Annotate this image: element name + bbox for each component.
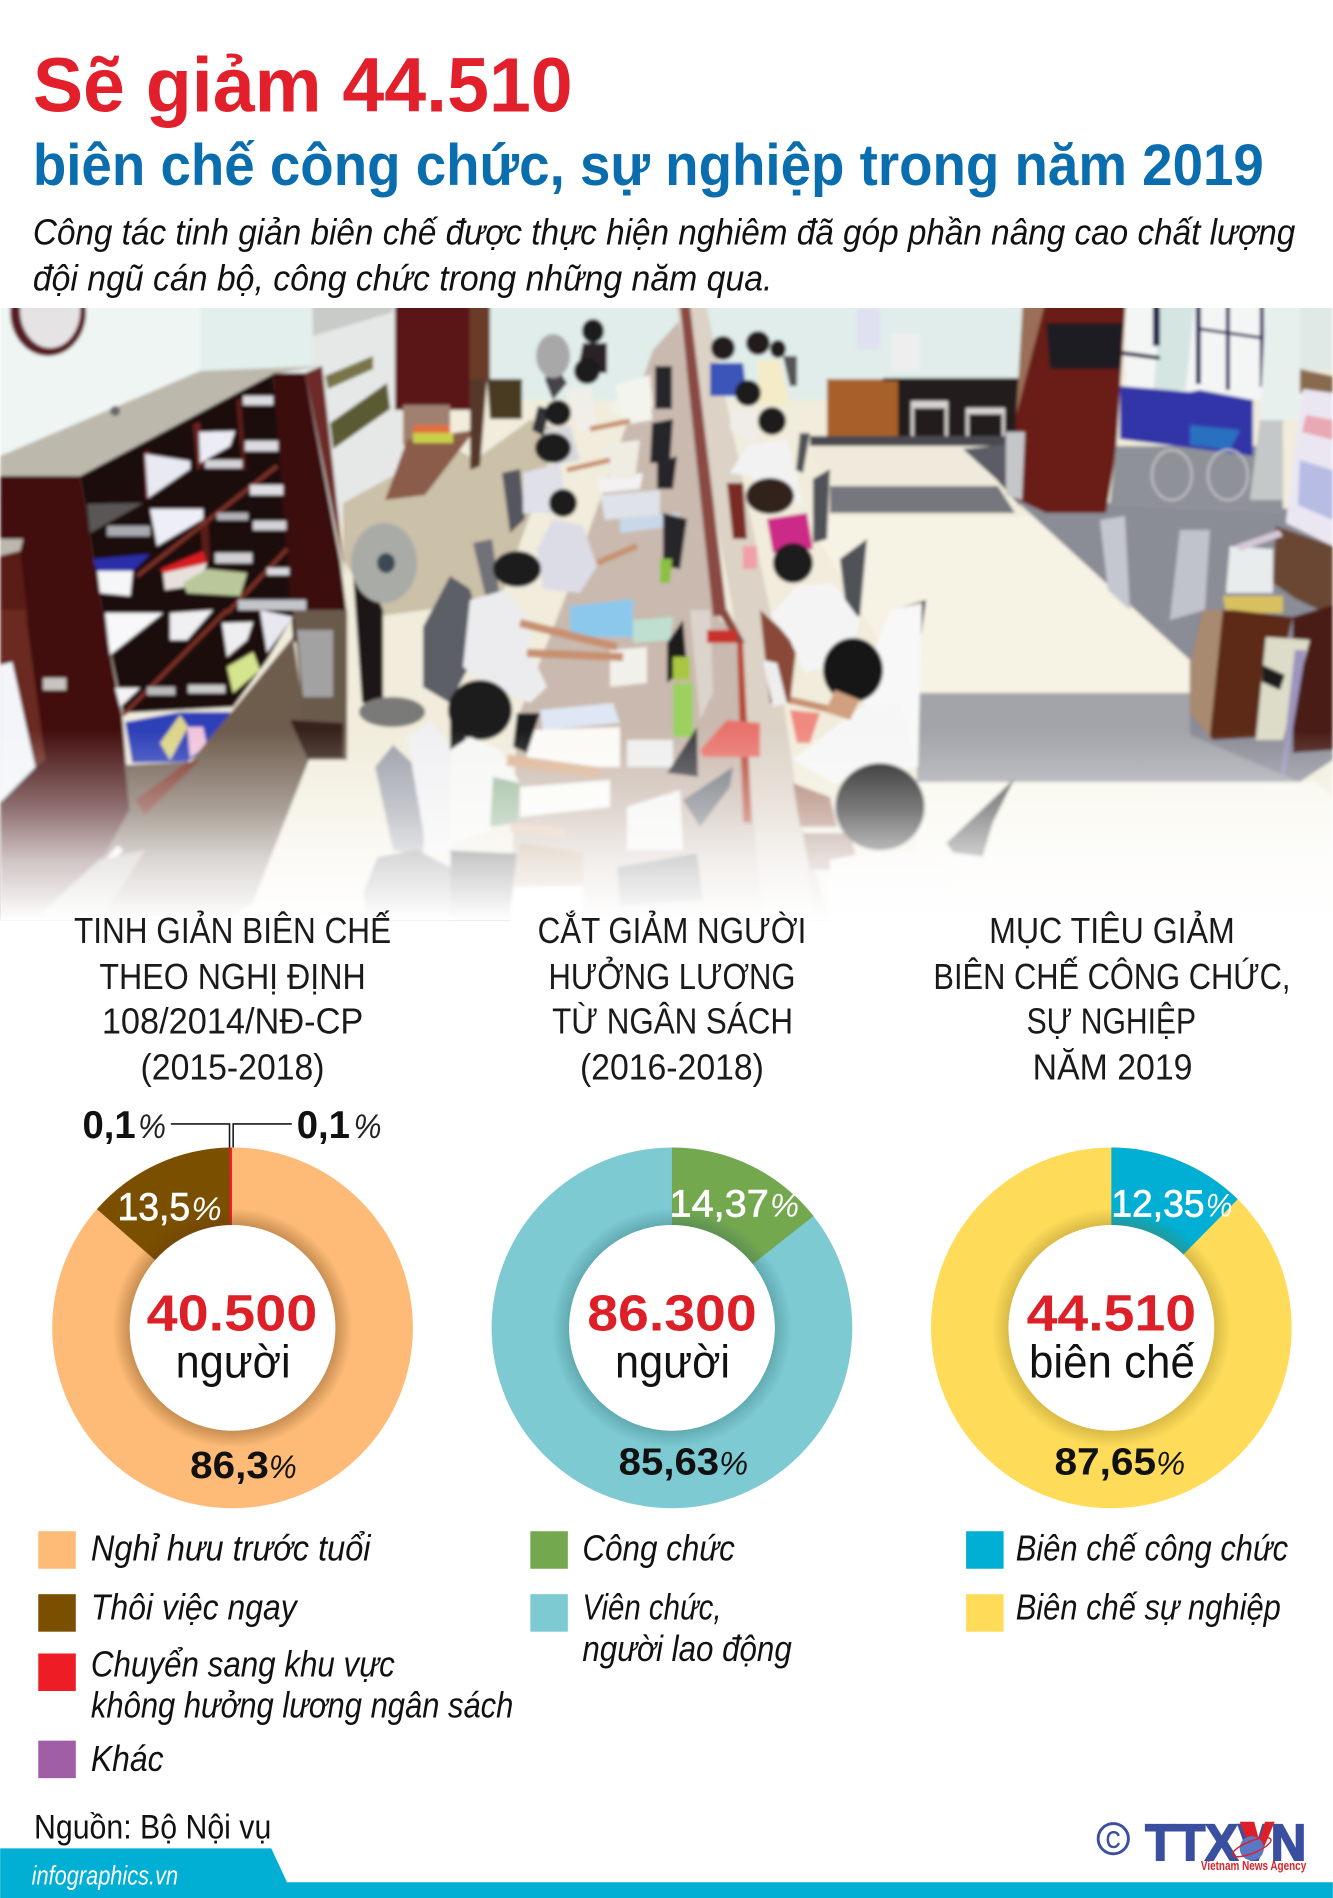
value: green segment: % bbox=[770, 1187, 799, 1224]
copyright mark: C bbox=[1106, 1827, 1120, 1854]
legend item: public employees bbox=[530, 1587, 792, 1669]
divider bbox=[676, 308, 802, 848]
inner shadow bbox=[113, 1208, 352, 1448]
value: blue segment: 12,35 bbox=[1111, 1183, 1205, 1225]
column 1 heading: THEO NGHỊ ĐỊNH bbox=[99, 956, 366, 997]
segment: transfer 0.1% bbox=[230, 1148, 232, 1247]
column 2 heading: CẮT GIẢM NGƯỜI bbox=[538, 909, 806, 951]
column 3 heading bbox=[933, 910, 1290, 1088]
globe accent bbox=[1230, 1822, 1275, 1860]
segment: civil servants 14.37% bbox=[672, 1148, 814, 1328]
intro text: đội ngũ cán bộ, công chức trong những năm qua. bbox=[33, 258, 772, 299]
legend item: public employees: Viên chức, bbox=[582, 1587, 722, 1628]
value: orange segment bbox=[190, 1444, 297, 1486]
footer bar bbox=[0, 1848, 1333, 1898]
centre circle bbox=[130, 1225, 335, 1431]
legend item: other: Khác bbox=[91, 1738, 164, 1779]
source: Nguồn: Bộ Nội vụ bbox=[34, 1809, 271, 1847]
subtitle: biên chế công chức, sự nghiệp trong năm 2019 bbox=[33, 133, 1264, 198]
inner shadow bbox=[992, 1208, 1231, 1448]
value: left callout: 0,1 bbox=[82, 1104, 136, 1147]
shelf unit bbox=[0, 366, 322, 476]
centre circle bbox=[1008, 1225, 1214, 1431]
legend item: public employees: người lao động bbox=[582, 1628, 792, 1669]
callout lines bbox=[171, 1124, 292, 1148]
photo: office service counter with staff bbox=[0, 268, 1333, 930]
value: orange segment: % bbox=[269, 1448, 297, 1485]
column 1 heading: 108/2014/NĐ-CP bbox=[102, 1001, 363, 1042]
desk row bbox=[512, 321, 814, 882]
column 1 heading bbox=[74, 910, 391, 1088]
inner shadow bbox=[552, 1208, 792, 1448]
legend chart 2 bbox=[530, 1527, 792, 1669]
legend item: public service positions bbox=[966, 1587, 1281, 1632]
centre unit: người bbox=[176, 1336, 291, 1388]
donut chart 1 bbox=[52, 1104, 413, 1508]
value: left callout bbox=[82, 1104, 166, 1147]
legend item: transfer: không hưởng lương ngân sách bbox=[91, 1685, 513, 1726]
intro text bbox=[33, 212, 1295, 299]
legend item: civil servants bbox=[530, 1527, 735, 1569]
staff left of counter: people bbox=[582, 319, 604, 343]
segment: immediate leave 13.5% bbox=[97, 1148, 233, 1328]
legend item: immediate leave: Thôi việc ngay bbox=[91, 1587, 298, 1628]
ring: retirement share bbox=[52, 1148, 413, 1508]
value: right callout: 0,1 bbox=[297, 1104, 350, 1147]
legend item: civil servants: Công chức bbox=[582, 1527, 735, 1568]
centre total: 40.500 bbox=[147, 1284, 317, 1341]
logo: TTXVN bbox=[1098, 1813, 1306, 1873]
value: right callout: % bbox=[354, 1108, 381, 1146]
value: orange segment: 86,3 bbox=[190, 1444, 269, 1486]
legend item: public service positions: Biên chế sự nghiệp bbox=[1016, 1587, 1281, 1628]
legend chart 3 bbox=[966, 1527, 1288, 1632]
value: right callout bbox=[297, 1104, 381, 1147]
title: Sẽ giảm 44.510 bbox=[33, 42, 573, 128]
wordmark: TTXVN bbox=[1145, 1813, 1306, 1871]
donut chart 2 bbox=[492, 1148, 852, 1508]
value: green segment: 14,37 bbox=[670, 1183, 769, 1225]
column 1 heading: (2015-2018) bbox=[141, 1047, 325, 1088]
agency name: Vietnam News Agency bbox=[1201, 1859, 1306, 1873]
column 2 heading bbox=[538, 909, 806, 1088]
value: yellow segment: 87,65 bbox=[1054, 1440, 1156, 1482]
legend chart 1 bbox=[38, 1527, 513, 1779]
ring: public employees bbox=[492, 1148, 852, 1508]
column 2 heading: HƯỞNG LƯƠNG bbox=[548, 955, 795, 997]
value: brown segment: % bbox=[191, 1190, 222, 1227]
right floor and column bbox=[1016, 500, 1333, 783]
staff left of counter: chairs bbox=[532, 406, 550, 436]
copyright mark bbox=[1098, 1824, 1128, 1854]
staff right of counter: chairs bbox=[796, 433, 810, 473]
right side of counter bbox=[727, 483, 747, 539]
windows bbox=[1124, 308, 1266, 401]
ring: public service staffing bbox=[931, 1148, 1292, 1508]
column 3 heading: SỰ NGHIỆP bbox=[1027, 1001, 1196, 1042]
donut chart 3 bbox=[931, 1148, 1292, 1508]
centre total: 44.510 bbox=[1027, 1284, 1196, 1341]
back wall furniture bbox=[824, 377, 886, 439]
column 1 heading: TINH GIẢN BIÊN CHẾ bbox=[74, 910, 391, 951]
footer site name: infographics.vn bbox=[32, 1861, 178, 1891]
centre total: 86.300 bbox=[587, 1284, 757, 1341]
legend item: transfer: Chuyển sang khu vực bbox=[91, 1643, 395, 1684]
value: teal segment: 85,63 bbox=[619, 1440, 719, 1482]
value: brown segment: 13,5 bbox=[118, 1186, 190, 1229]
legend item: early retirement: Nghỉ hưu trước tuổi bbox=[91, 1527, 371, 1568]
legend item: transfer bbox=[38, 1643, 513, 1726]
value: left callout: % bbox=[138, 1108, 166, 1146]
segment: civil servants 12.35% bbox=[1111, 1148, 1238, 1328]
column 2 heading: TỪ NGÂN SÁCH bbox=[552, 1001, 793, 1042]
value: yellow segment: % bbox=[1156, 1444, 1185, 1481]
centre unit: biên chế bbox=[1029, 1336, 1195, 1388]
column 3 heading: MỤC TIÊU GIẢM bbox=[989, 910, 1235, 951]
centre circle bbox=[569, 1225, 775, 1431]
legend item: immediate leave bbox=[38, 1587, 298, 1632]
staff right of counter: people bbox=[770, 340, 786, 358]
value: blue segment: % bbox=[1206, 1187, 1232, 1224]
legend item: civil service positions: Biên chế công chức bbox=[1016, 1527, 1288, 1568]
legend item: other bbox=[38, 1738, 164, 1779]
centre unit: người bbox=[615, 1336, 730, 1388]
right wall notice and stand bbox=[1300, 369, 1333, 393]
lower cabinet bbox=[102, 636, 310, 906]
value: teal segment: % bbox=[719, 1444, 748, 1481]
column 3 heading: NĂM 2019 bbox=[1033, 1047, 1192, 1088]
fan bbox=[353, 575, 383, 703]
column 2 heading: (2016-2018) bbox=[580, 1047, 764, 1088]
